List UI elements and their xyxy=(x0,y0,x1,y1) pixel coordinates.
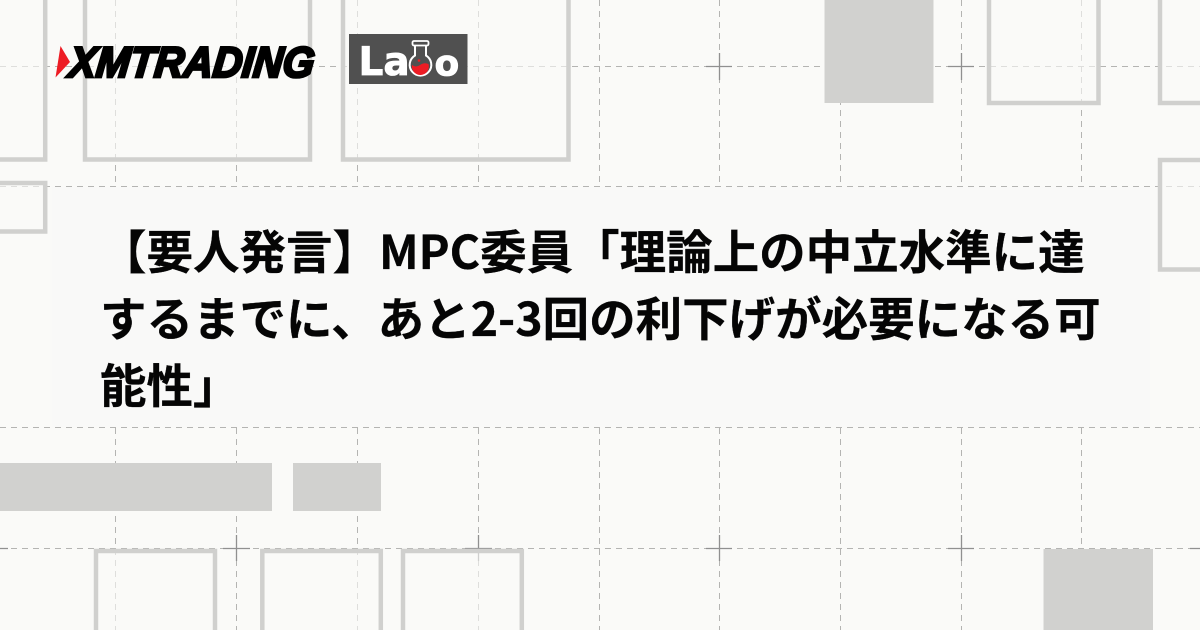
logo: Labo xyxy=(349,34,468,84)
frames: top row xyxy=(0,0,1200,270)
logo: Labo: La xyxy=(358,40,410,84)
title: するまでに、あと2-3回の利下げが必要になる可 xyxy=(100,283,1101,350)
title xyxy=(100,216,1101,417)
frames: bottom row xyxy=(96,551,522,630)
panel: title background xyxy=(52,187,1150,427)
icon: flask xyxy=(410,41,431,76)
title: 能性」 xyxy=(100,350,240,417)
title: 【要人発言】MPC委員「理論上の中立水準に達 xyxy=(100,216,1085,283)
logo: Labo: o xyxy=(434,44,459,84)
